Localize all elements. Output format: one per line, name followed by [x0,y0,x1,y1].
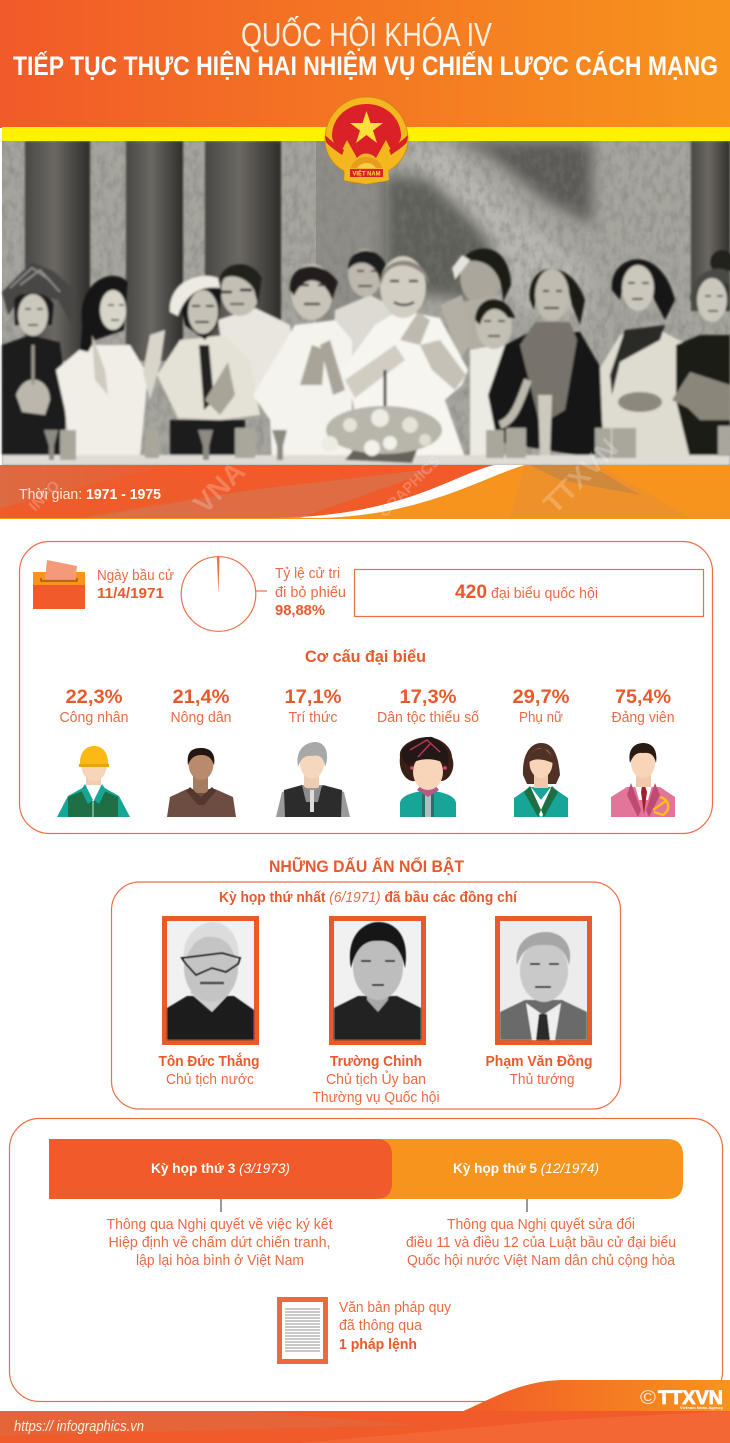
icon: farmer [167,748,236,817]
stat: ethnic minorities [377,687,479,726]
person 11 [600,330,692,458]
stat: women [512,687,570,726]
text: 3rd session resolution: Thông qua Nghị quyết về việc ký kết [106,1217,332,1233]
name: Phạm Văn Đồng [486,1053,592,1088]
stat: women: Phụ nữ [519,710,563,726]
text: 3rd session resolution [106,1217,332,1269]
logo: TTXVN: Vietnam News Agency [680,1406,723,1410]
text: 5th session resolution: Quốc hội nước Việt Nam dân chủ cộng hòa [407,1253,676,1269]
stat: intellectuals: Trí thức [288,710,338,726]
election date: Ngày bầu cử [97,568,174,584]
session heading: Kỳ họp thứ nhất (6/1971) đã bầu các đồng chí [219,889,518,906]
title: QUỐC HỘI KHÓA IV [241,15,492,53]
session bar: 3rd session [49,1139,392,1199]
person 5 [253,320,352,460]
stat: farmers: Nông dân [170,710,232,726]
delegate count box: 420 [455,582,487,603]
voter turnout text: 98,88% [275,603,325,619]
watermarks: TTXVN [537,432,624,519]
time label: Thời gian: 1971 - 1975 [19,487,161,503]
flowers [345,442,420,463]
delegate count box [354,570,704,616]
panel: first session [112,882,620,1109]
person 2 [56,345,148,458]
legal documents text: đã thông qua [339,1318,423,1334]
stat: women: 29,7% [512,687,570,708]
text: 5th session resolution: Thông qua Nghị quyết sửa đổi [447,1217,635,1233]
footer [0,1380,730,1443]
person 9 [470,345,505,458]
text: 3rd session resolution: lập lại hòa bình ở Việt Nam [136,1253,304,1269]
stat: ethnic minorities: 17,3% [400,687,457,708]
name: Trường Chinh: Chủ tịch Ủy ban [326,1070,426,1088]
voter turnout text: đi bỏ phiếu [275,585,346,601]
name: Trường Chinh [312,1053,440,1106]
icon: ethnic minority woman [400,737,456,817]
stat: party members: Đảng viên [612,710,674,726]
stat: party members [612,687,674,726]
timeline band [0,432,730,521]
person 10 [488,332,606,460]
icon: worker [57,746,130,817]
icon: party member [611,743,675,817]
text: 5th session resolution: điều 11 và điều 12 của Luật bầu cử đại biểu [406,1235,676,1251]
stat: party members: 75,4% [615,687,671,708]
name: Phạm Văn Đồng: Thủ tướng [510,1072,574,1088]
person 1 [2,335,68,458]
name: Trường Chinh: Thường vụ Quốc hội [312,1090,440,1106]
icon: national emblem [325,97,408,184]
name: Trường Chinh: Trường Chinh [330,1053,422,1070]
stat: ethnic minorities: Dân tộc thiểu số [377,710,479,726]
header banner [0,0,730,128]
logo: TTXVN: © [640,1388,656,1409]
stat: farmers [170,687,232,726]
stat: intellectuals [284,687,342,726]
watermarks: GRAPHICS [376,453,444,521]
session bar: 3rd session: Kỳ họp thứ 3 (3/1973) [151,1160,290,1176]
legal documents text [339,1300,452,1353]
footer url: https:// infographics.vn [14,1419,144,1435]
legal documents text: Văn bản pháp quy [339,1300,452,1316]
heading: delegate structure: Cơ cấu đại biểu [305,648,426,666]
session bar: 5th session: Kỳ họp thứ 5 (12/1974) [453,1160,599,1176]
stat: workers: Công nhân [60,710,128,726]
yellow stripe [2,127,730,141]
voter turnout text: Tỷ lệ cử tri [275,566,340,582]
name: Tôn Đức Thắng: Chủ tịch nước [166,1072,254,1088]
election date: 11/4/1971 [97,586,164,602]
name: Phạm Văn Đồng: Phạm Văn Đồng [486,1053,592,1070]
portrait: Phạm Văn Đồng [495,916,592,1045]
icon: national emblem: VIỆT NAM [352,170,380,178]
watermarks: VNA [187,456,251,519]
watermarks: INFO [26,477,63,515]
icon: legal document [277,1297,328,1364]
stat: intellectuals: 17,1% [284,687,342,708]
icon: intellectual [276,742,350,817]
heading: highlights: NHỮNG DẤU ẤN NỔI BẬT [269,856,465,876]
name: Tôn Đức Thắng: Tôn Đức Thắng [158,1052,260,1070]
stat: farmers: 21,4% [172,687,230,708]
session bar: 5th session [370,1139,683,1199]
stat: workers: 22,3% [66,687,123,708]
voter turnout text [275,566,346,619]
watermarks [26,432,624,521]
legal documents text: 1 pháp lệnh [339,1337,417,1353]
panel: later sessions [10,1118,722,1402]
person bodies back row [218,308,300,400]
icon: ballot box [33,560,85,609]
pie chart: voter turnout [181,557,267,631]
title [13,15,718,81]
icon: woman [514,743,568,817]
person 3 [170,420,245,458]
name: Tôn Đức Thắng [158,1052,260,1088]
portrait: Tôn Đức Thắng [162,916,259,1045]
portrait: Trường Chinh [329,916,426,1045]
stat: workers [60,687,128,726]
text: 5th session resolution [406,1217,676,1269]
delegate count box: đại biểu quốc hội [491,586,598,602]
photo: delegates applauding [2,141,730,465]
logo: TTXVN: TTXVN [658,1388,723,1409]
text: 3rd session resolution: Hiệp định về chấm dứt chiến tranh, [108,1235,330,1251]
election date [97,568,174,602]
person 12 [676,335,730,458]
table [2,455,730,465]
panel: election overview [20,542,712,834]
glasses [44,430,287,460]
person 7 main [342,310,468,460]
